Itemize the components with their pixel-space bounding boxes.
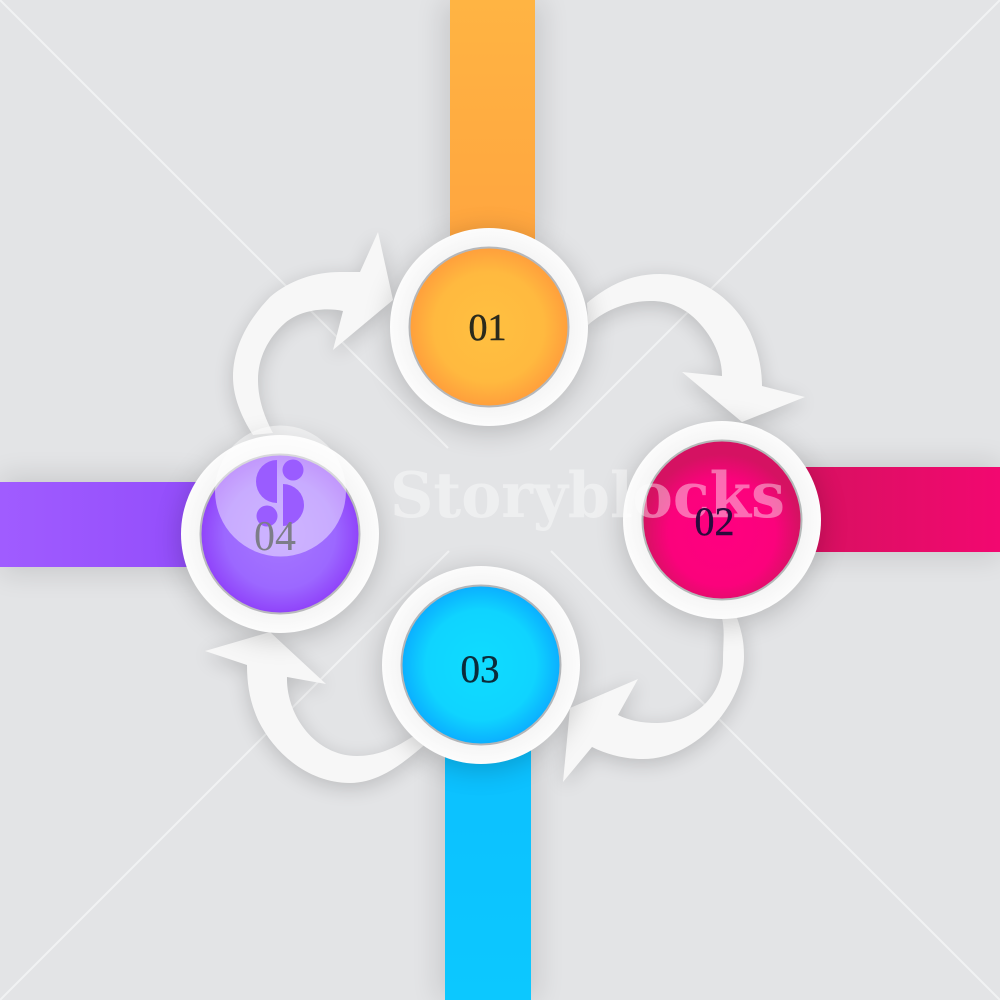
bar: step 02 pink bbox=[800, 467, 1000, 552]
bar: step 01 orange bbox=[450, 0, 535, 245]
arrow: step 04 to step 01 bbox=[233, 232, 393, 435]
arrow shadows bbox=[205, 237, 805, 788]
node: step 04 bbox=[181, 435, 379, 633]
arrow: step 02 to step 03 bbox=[563, 618, 744, 782]
watermark: logo badge bbox=[215, 426, 346, 556]
node: step 02 bbox=[623, 421, 821, 619]
node: step 03 bbox=[382, 566, 580, 764]
number 02: 02 bbox=[694, 499, 734, 544]
bar: step 04 purple bbox=[0, 482, 200, 567]
arrow: step 01 to step 02 bbox=[587, 274, 805, 422]
arrow: step 03 to step 04 bbox=[205, 632, 430, 783]
number 01: 01 bbox=[468, 307, 506, 349]
node shadows bbox=[181, 233, 821, 769]
watermark: wordmark: Storyblocks bbox=[390, 458, 785, 532]
node: step 01 bbox=[390, 228, 588, 426]
bar: step 03 blue bbox=[445, 750, 531, 1000]
number 03: 03 bbox=[460, 648, 500, 691]
number 04: 04 bbox=[254, 514, 296, 560]
